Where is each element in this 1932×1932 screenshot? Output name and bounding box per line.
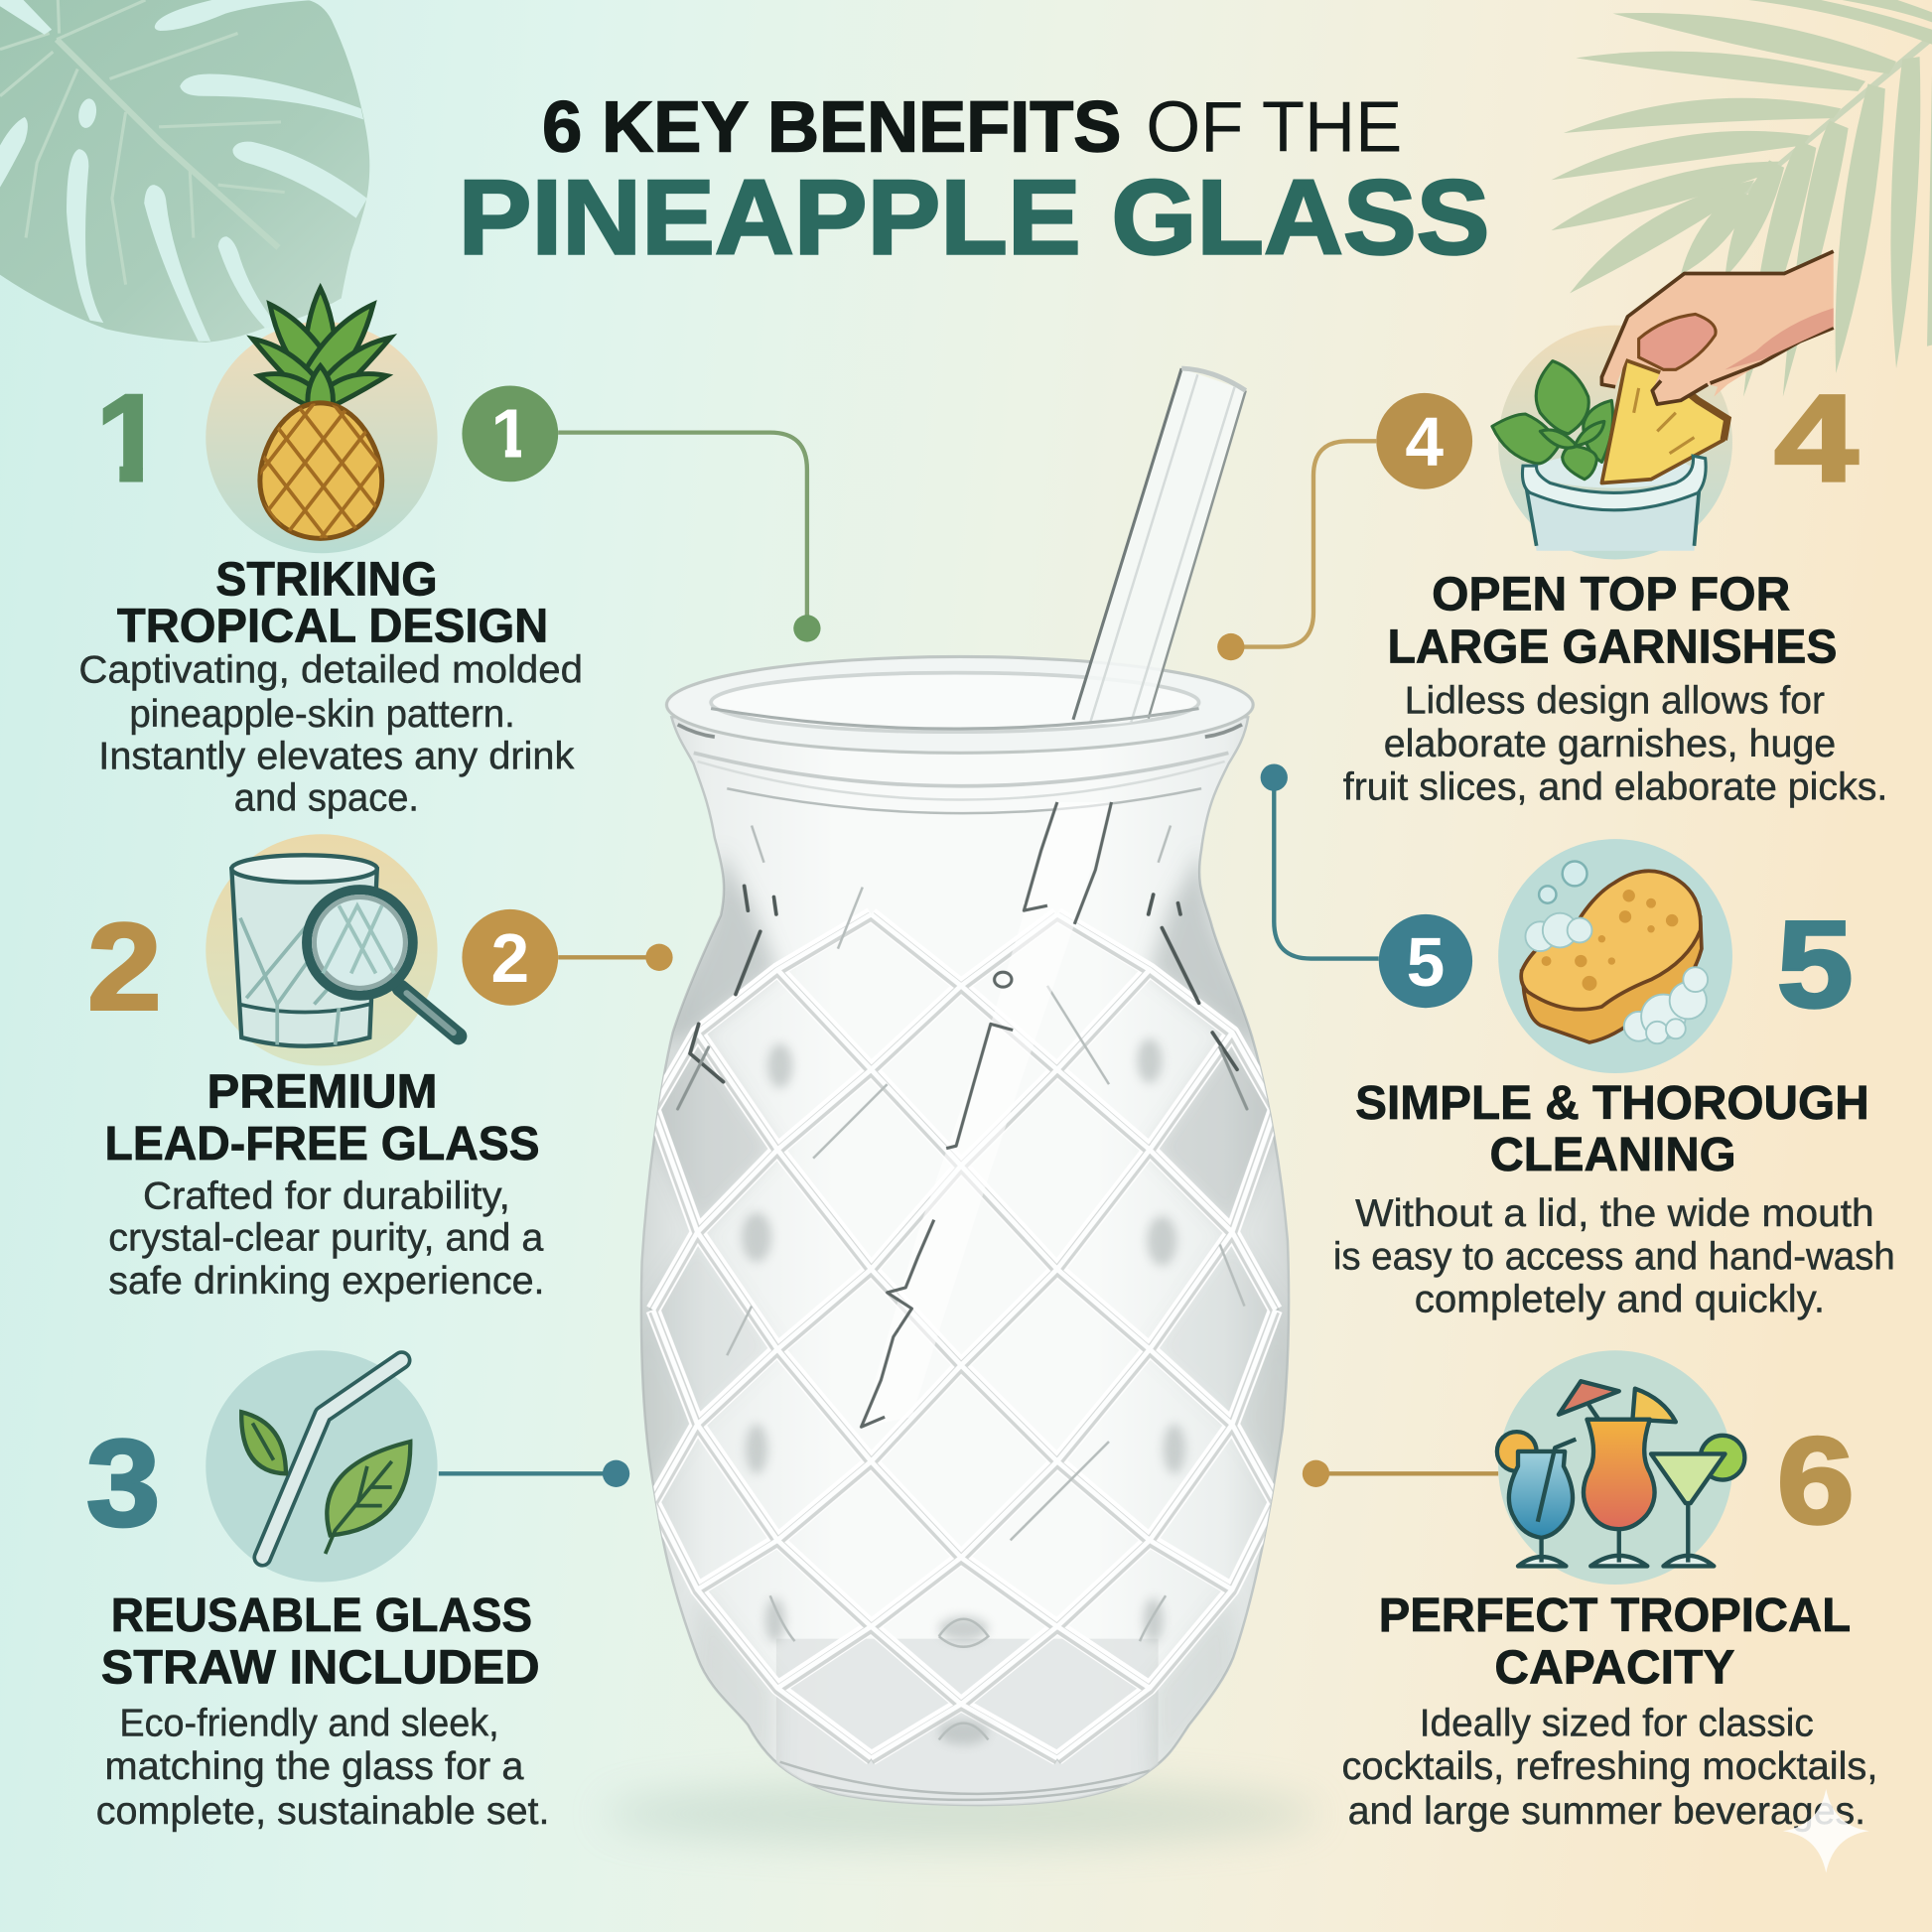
- heading 5: [1355, 1076, 1869, 1181]
- benefit 6: tropical capacity: [1303, 1350, 1877, 1833]
- icon circle: [206, 322, 438, 553]
- heading 1: [117, 552, 548, 653]
- number badge 1: [462, 385, 558, 482]
- description 1: [78, 649, 583, 820]
- big number 4: 4: [1774, 370, 1859, 507]
- heading 1: TROPICAL DESIGN: [117, 600, 548, 653]
- heading 5: SIMPLE & THOROUGH: [1355, 1076, 1869, 1130]
- front lip of rim: [711, 709, 1199, 729]
- connector 1: [558, 433, 821, 642]
- description 2: [108, 1174, 545, 1303]
- heading 6: PERFECT TROPICAL: [1379, 1588, 1851, 1642]
- straw seen through glass: [862, 802, 1111, 1427]
- big number 5: 5: [1777, 897, 1854, 1034]
- heading 6: [1379, 1588, 1851, 1694]
- palm frond: [1552, 0, 1932, 397]
- description 4: elaborate garnishes, huge: [1384, 723, 1836, 765]
- description 4: Lidless design allows for: [1405, 680, 1825, 723]
- connector 6: [1303, 1460, 1498, 1487]
- connector 3: [439, 1460, 629, 1487]
- description 3: Eco-friendly and sleek,: [119, 1703, 499, 1745]
- heading 3: REUSABLE GLASS: [111, 1588, 532, 1642]
- description 1: pineapple-skin pattern.: [129, 693, 515, 736]
- icon circle: [1498, 326, 1732, 559]
- description 2: safe drinking experience.: [108, 1260, 545, 1303]
- number badge 2: 2: [490, 919, 529, 997]
- straw: [1073, 368, 1246, 724]
- benefit 5: simple cleaning: [1261, 763, 1895, 1321]
- number badge 1: 1: [490, 394, 529, 472]
- rim: [666, 656, 1253, 799]
- number badge 5: 5: [1407, 923, 1445, 1001]
- title line one: OF THE: [1146, 88, 1402, 168]
- description 5: Without a lid, the wide mouth: [1355, 1192, 1874, 1235]
- ground shadow: [604, 1782, 1318, 1846]
- heading 2: LEAD-FREE GLASS: [104, 1117, 540, 1171]
- heading 4: [1387, 567, 1837, 674]
- description 1: and space.: [234, 777, 419, 820]
- description 2: crystal-clear purity, and a: [108, 1217, 544, 1260]
- watermark sparkle: [1783, 1789, 1869, 1872]
- description 1: Captivating, detailed molded: [78, 649, 583, 692]
- heading 3: [101, 1588, 540, 1694]
- number badge 4: [1376, 393, 1472, 489]
- central glass with straw: [604, 368, 1318, 1846]
- benefit 1: striking tropical design: [78, 288, 821, 820]
- icon circle: [206, 1350, 438, 1583]
- title line one: 6 KEY BENEFITS: [542, 88, 1121, 168]
- icon: sponge with foam: [1521, 862, 1708, 1043]
- big number 2: 2: [87, 898, 162, 1035]
- description 4: fruit slices, and elaborate picks.: [1343, 765, 1887, 808]
- description 1: Instantly elevates any drink: [98, 735, 575, 777]
- heading 5: CLEANING: [1489, 1128, 1736, 1181]
- icon circle: [1498, 1350, 1732, 1585]
- heading 2: PREMIUM: [207, 1065, 438, 1119]
- benefit 4: open top: [1217, 251, 1887, 808]
- description 3: matching the glass for a: [104, 1745, 524, 1788]
- icon: three cocktails: [1497, 1381, 1744, 1566]
- title: PINEAPPLE GLASS: [459, 158, 1489, 277]
- glass shading and lattice pattern: [617, 788, 1307, 1811]
- heading 4: OPEN TOP FOR: [1432, 567, 1790, 621]
- description 3: [96, 1703, 550, 1833]
- connector 5: [1261, 763, 1379, 959]
- description 6: cocktails, refreshing mocktails,: [1342, 1745, 1877, 1788]
- icon: hand placing garnish in glass: [1492, 251, 1834, 551]
- icon: straw and leaves: [241, 1360, 410, 1558]
- glass body: [641, 717, 1289, 1805]
- description 2: Crafted for durability,: [143, 1174, 510, 1217]
- icon circle: [206, 834, 438, 1066]
- number badge 4: 4: [1405, 403, 1444, 481]
- icon: pineapple: [246, 283, 397, 541]
- big number 6: 6: [1777, 1413, 1855, 1550]
- description 5: is easy to access and hand-wash: [1333, 1235, 1895, 1278]
- heading 3: STRAW INCLUDED: [101, 1640, 540, 1694]
- heading 1: STRIKING: [215, 552, 438, 606]
- number badge 2: [462, 909, 558, 1006]
- description 6: Ideally sized for classic: [1420, 1703, 1814, 1745]
- big number 1: 1: [96, 370, 165, 507]
- number badge 5: [1379, 914, 1472, 1008]
- description 3: complete, sustainable set.: [96, 1790, 550, 1833]
- heading 6: CAPACITY: [1494, 1640, 1734, 1694]
- front rim of icon glass: [1522, 456, 1706, 510]
- benefit 2: premium lead-free glass: [87, 834, 673, 1303]
- heading 4: LARGE GARNISHES: [1387, 621, 1837, 674]
- benefit 3: reusable glass straw: [86, 1350, 629, 1833]
- description 6: [1342, 1703, 1877, 1833]
- description 5: [1333, 1192, 1895, 1321]
- description 4: [1343, 680, 1887, 808]
- heading 2: [104, 1065, 540, 1171]
- icon: glass with magnifier: [231, 855, 459, 1046]
- title: [459, 88, 1489, 277]
- title line one: [542, 88, 1402, 168]
- shoulder shadow lines: [678, 886, 1247, 1109]
- description 6: and large summer beverages.: [1348, 1790, 1865, 1833]
- connector 4: [1217, 441, 1376, 660]
- description 5: completely and quickly.: [1415, 1279, 1825, 1321]
- big number 3: 3: [86, 1415, 160, 1552]
- icon circle: [1498, 839, 1732, 1073]
- connector 2: [558, 944, 673, 971]
- monstera leaf: [0, 0, 369, 343]
